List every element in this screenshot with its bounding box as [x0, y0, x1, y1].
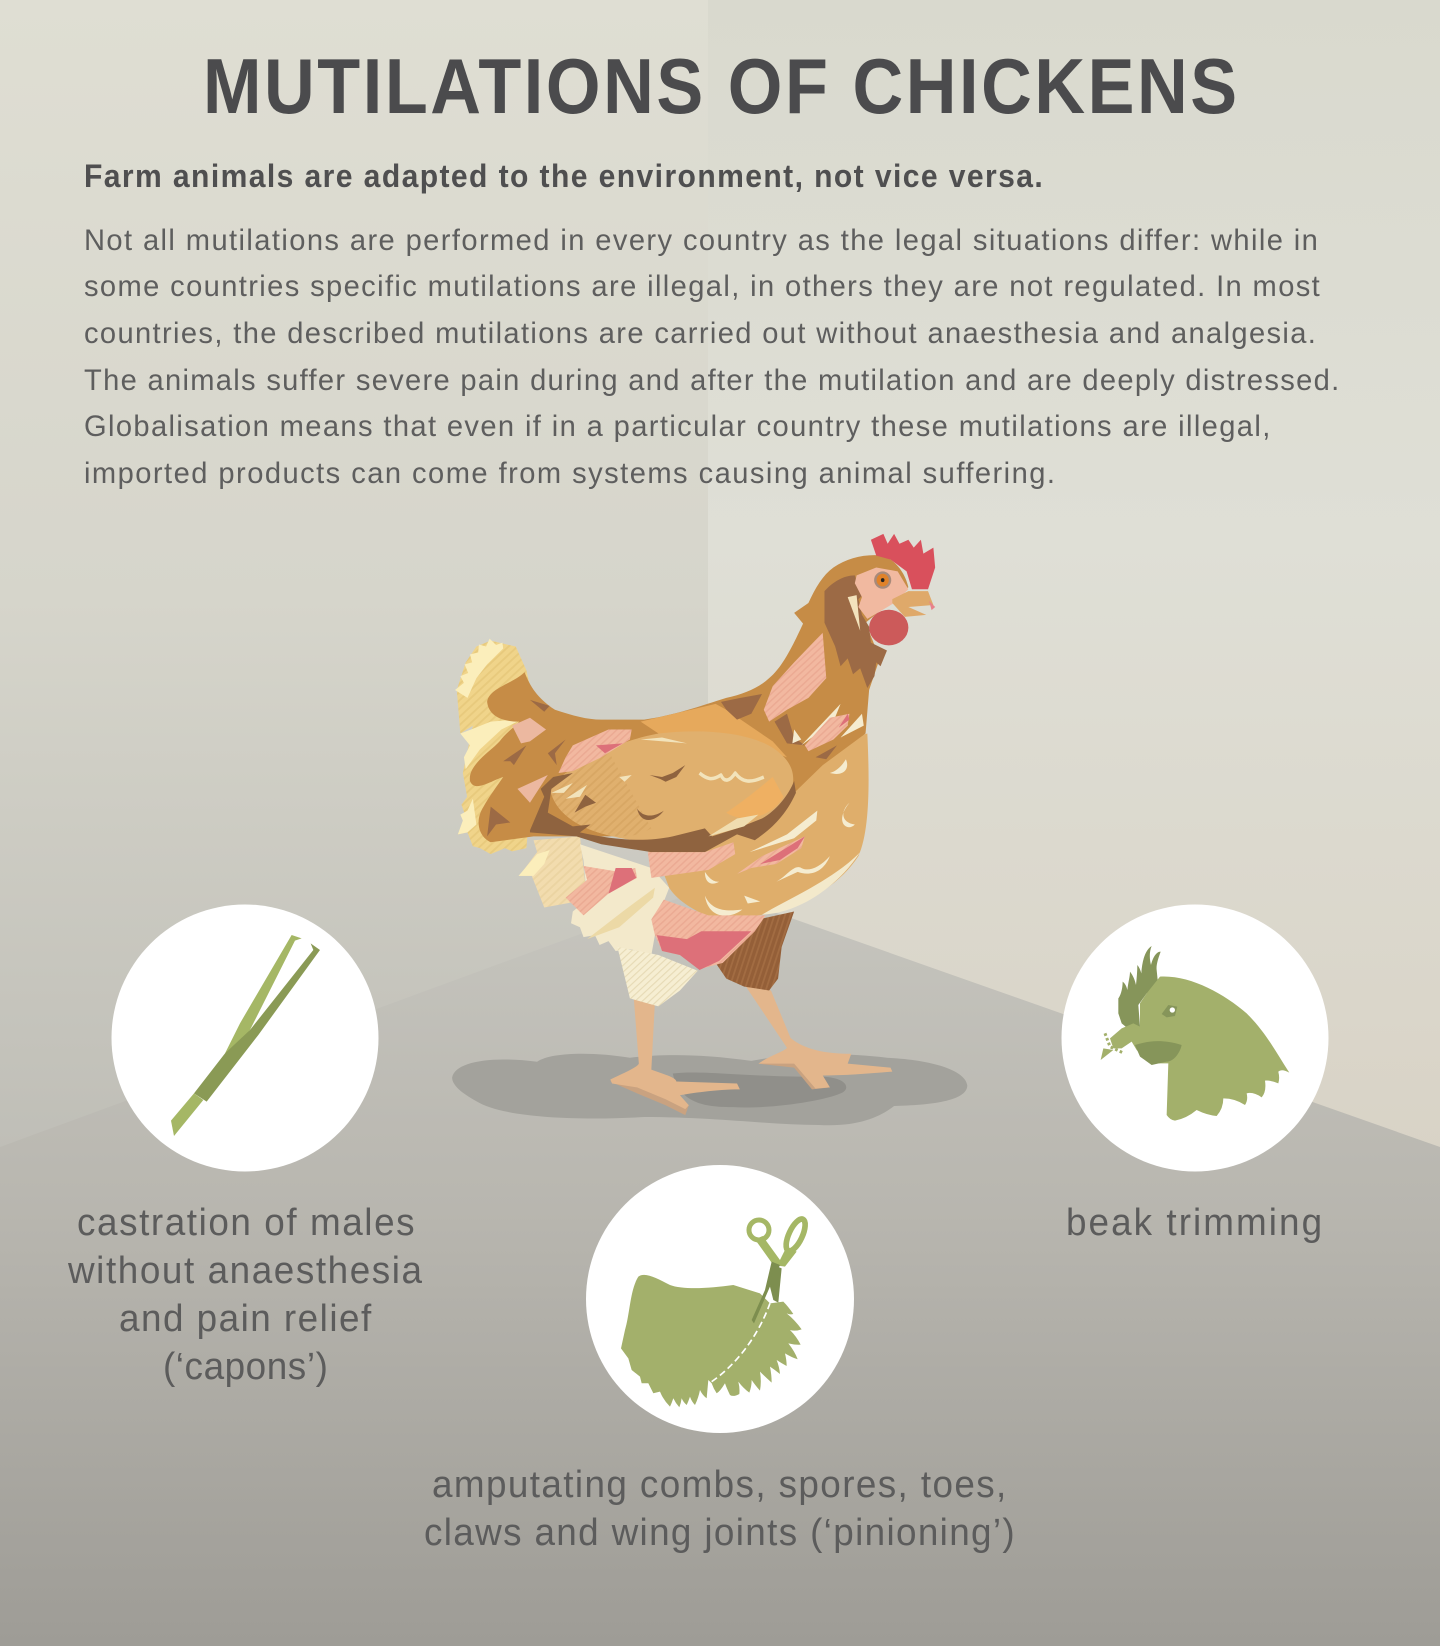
wattle — [869, 610, 908, 645]
brown thigh — [716, 911, 794, 991]
raw skin — [596, 714, 849, 970]
label — [424, 1462, 1015, 1553]
intro text block: Not all mutilations are performed in every country as the legal situations differ: while in — [84, 224, 1318, 257]
circle — [586, 1165, 854, 1433]
intro text block: imported products can come from systems causing animal suffering. — [84, 457, 1055, 490]
chest — [644, 734, 869, 919]
neck dark plumage — [824, 575, 887, 688]
intro text block: The animals suffer severe pain during and after the mutilation and are deeply distressed. — [84, 364, 1339, 397]
intro text block: countries, the described mutilations are carried out without anaesthesia and analgesia. — [84, 317, 1316, 350]
icon: tweezers — [171, 935, 320, 1136]
intro text block — [84, 224, 1339, 490]
label: castration of males — [77, 1200, 415, 1243]
label: and pain relief — [119, 1296, 372, 1339]
intro text block: Globalisation means that even if in a particular country these mutilations are illegal, — [84, 410, 1270, 443]
title: MUTILATIONS OF CHICKENS — [203, 43, 1237, 130]
illustration: injured chicken with shadow — [452, 534, 967, 1125]
beak — [892, 591, 935, 617]
tail feathers — [455, 639, 537, 854]
icon: wing and scissors — [621, 1216, 809, 1407]
shadow — [452, 1054, 967, 1125]
label: claws and wing joints (‘pinioning’) — [424, 1510, 1015, 1553]
label — [67, 1200, 422, 1387]
icon: chicken head — [1101, 946, 1289, 1121]
circle — [1062, 904, 1328, 1172]
label: beak trimming — [1066, 1200, 1322, 1243]
face — [855, 567, 908, 619]
belly feathers — [519, 836, 698, 1006]
comb — [871, 534, 935, 589]
label: amputating combs, spores, toes, — [432, 1462, 1006, 1505]
ear — [848, 595, 860, 631]
label: without anaesthesia — [67, 1248, 422, 1291]
legs — [610, 987, 892, 1115]
panel: beak trimming — [1062, 904, 1328, 1243]
eye — [874, 571, 891, 589]
panel: castration — [67, 904, 422, 1387]
pale pink skin patches — [512, 718, 548, 803]
wing — [530, 731, 796, 852]
neck and tail markings — [487, 694, 837, 836]
label: (‘capons’) — [163, 1344, 328, 1387]
subtitle: Farm animals are adapted to the environment, not vice versa. — [84, 158, 1043, 194]
circle — [112, 904, 378, 1172]
chest feather marks — [705, 704, 864, 916]
back orange highlight — [641, 704, 787, 757]
panel: amputating — [424, 1165, 1015, 1553]
intro text block: some countries specific mutilations are illegal, in others they are not regulated. In most — [84, 270, 1320, 303]
back and neck plumage — [470, 555, 908, 842]
hatched wounds — [559, 633, 849, 969]
